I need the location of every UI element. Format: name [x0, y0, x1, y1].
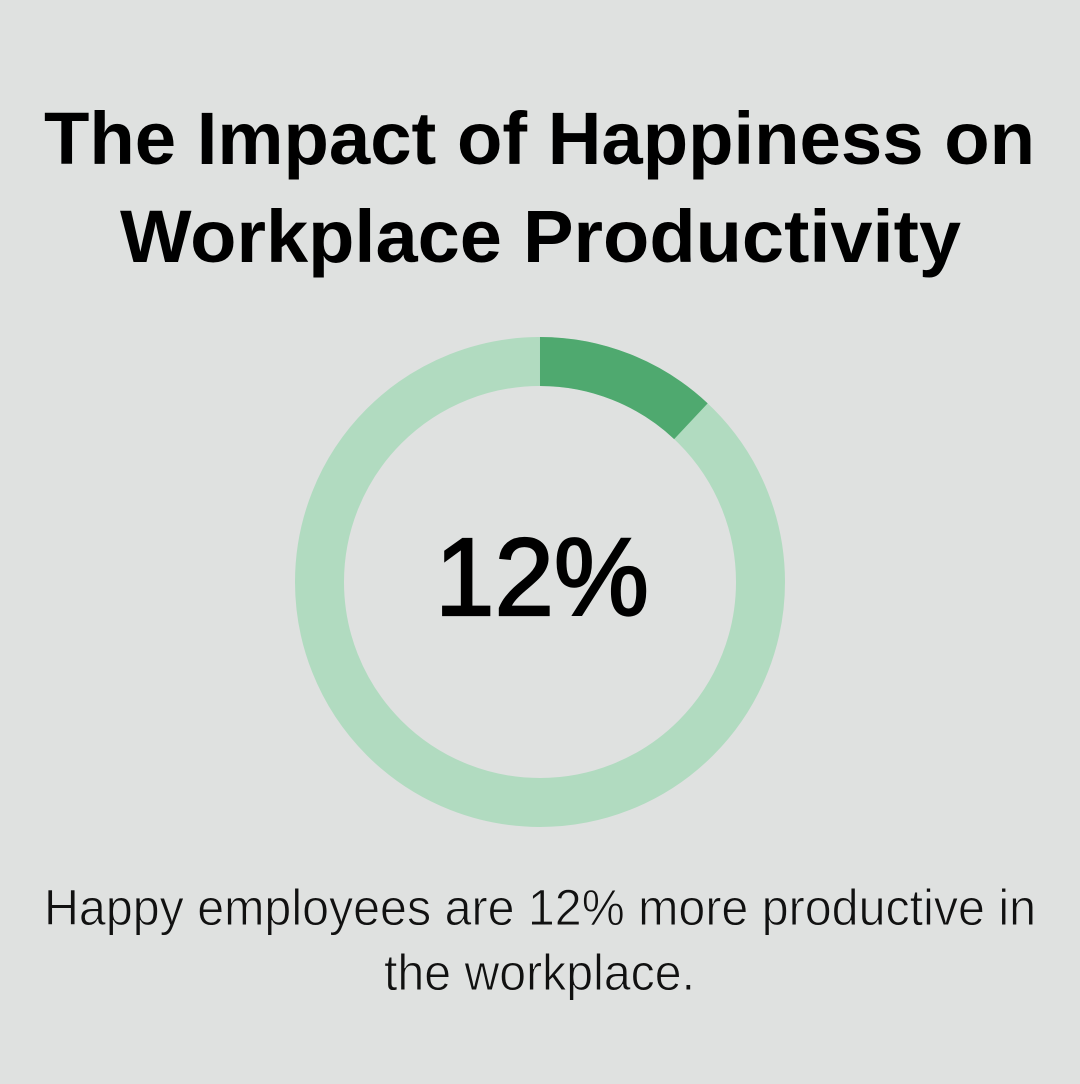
title [44, 97, 1035, 278]
caption [44, 879, 1036, 1001]
caption: the workplace. [384, 944, 695, 1001]
caption: Happy employees are 12% more productive in [44, 879, 1036, 936]
title: The Impact of Happiness on [44, 97, 1035, 180]
title: Workplace Productivity [120, 195, 961, 278]
donut segment: 12% [540, 362, 691, 421]
center value: 12% [435, 516, 649, 639]
donut chart [320, 362, 760, 802]
donut track [320, 362, 760, 802]
